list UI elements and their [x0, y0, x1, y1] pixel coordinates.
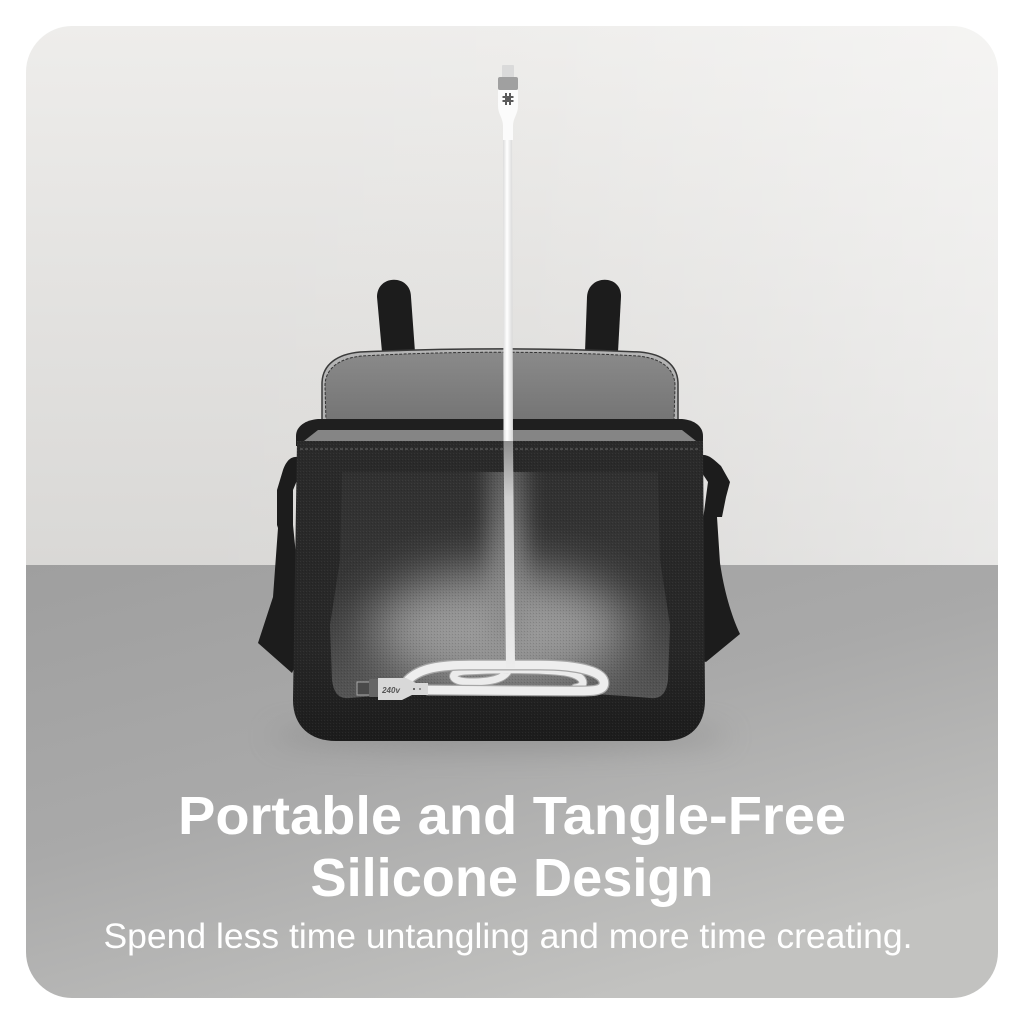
- illustration: messenger bag with cable: [258, 65, 740, 741]
- open bag flap: [322, 349, 678, 422]
- title: [178, 786, 846, 908]
- vertical cable inside bag: [504, 441, 515, 668]
- bag opening rim: [296, 419, 703, 446]
- right flap tab: [585, 280, 621, 352]
- subtitle: Spend less time untangling and more time creating.: [104, 917, 912, 956]
- left flap tab: [377, 280, 415, 352]
- wall light overlay: [745, 58, 998, 565]
- floor: [26, 565, 998, 998]
- coiled cable: [408, 660, 604, 691]
- coiled cable connector with 240W label: [357, 678, 428, 700]
- right shoulder strap: [700, 455, 740, 662]
- fabric weave texture: [293, 441, 705, 741]
- top cable connector: [498, 65, 518, 140]
- coiled cable connector with 240W label: 240v: [381, 686, 400, 695]
- bag interior lip: [304, 430, 696, 441]
- title: Portable and Tangle-Free: [178, 786, 846, 846]
- bag shadow on floor: [270, 724, 730, 748]
- bag body: [293, 441, 705, 741]
- wall: [26, 26, 998, 566]
- title: Silicone Design: [310, 848, 714, 908]
- vertical cable: [503, 138, 513, 441]
- left shoulder strap: [258, 457, 298, 673]
- top stitching: [300, 448, 700, 450]
- icon: brand logo on connector: [502, 93, 514, 105]
- translucent see-through window: [330, 472, 670, 698]
